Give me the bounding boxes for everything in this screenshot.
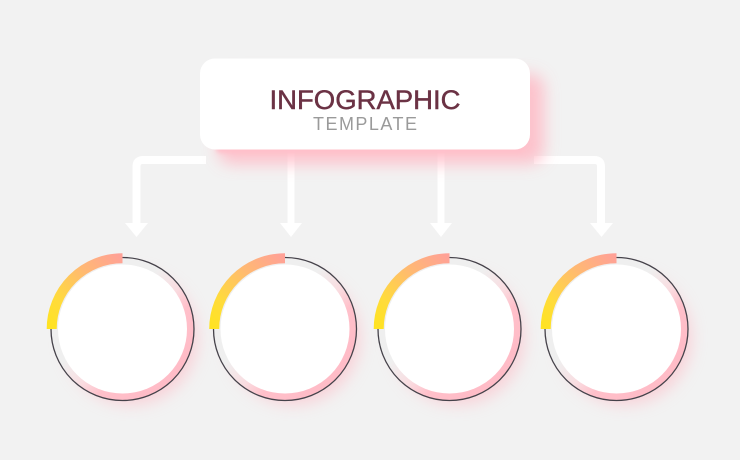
soft shadow [559, 272, 691, 404]
thin outline [378, 258, 521, 400]
card pink shadow [218, 74, 544, 164]
crescent ring [378, 258, 520, 400]
arrow: centre right branch [430, 150, 452, 237]
thin outline [545, 258, 688, 400]
card body [200, 58, 530, 150]
title: INFOGRAPHIC [270, 85, 460, 115]
arrow: centre left branch [280, 150, 302, 237]
arrow: far left branch [125, 160, 206, 237]
crescent ring [52, 258, 194, 400]
circle 1 [51, 258, 197, 404]
gradient arc [546, 258, 616, 329]
circle 2 [214, 258, 360, 404]
gradient arc [214, 258, 285, 329]
soft shadow [392, 272, 524, 404]
white disc [552, 264, 681, 394]
soft shadow [65, 272, 197, 404]
arrow: far right branch [534, 160, 613, 237]
gradient arc [52, 258, 123, 329]
soft shadow [228, 272, 360, 404]
connector arrows [125, 150, 613, 237]
white disc [220, 264, 350, 394]
thin outline [51, 258, 194, 400]
crescent ring [546, 258, 688, 400]
title card [200, 58, 544, 164]
circle 3 [378, 258, 524, 404]
thin outline [214, 258, 356, 400]
white disc [58, 264, 187, 394]
circle 4 [545, 258, 691, 404]
gradient arc [379, 258, 450, 329]
subtitle: TEMPLATE [313, 114, 417, 134]
white disc [385, 264, 514, 394]
crescent ring [214, 258, 356, 400]
